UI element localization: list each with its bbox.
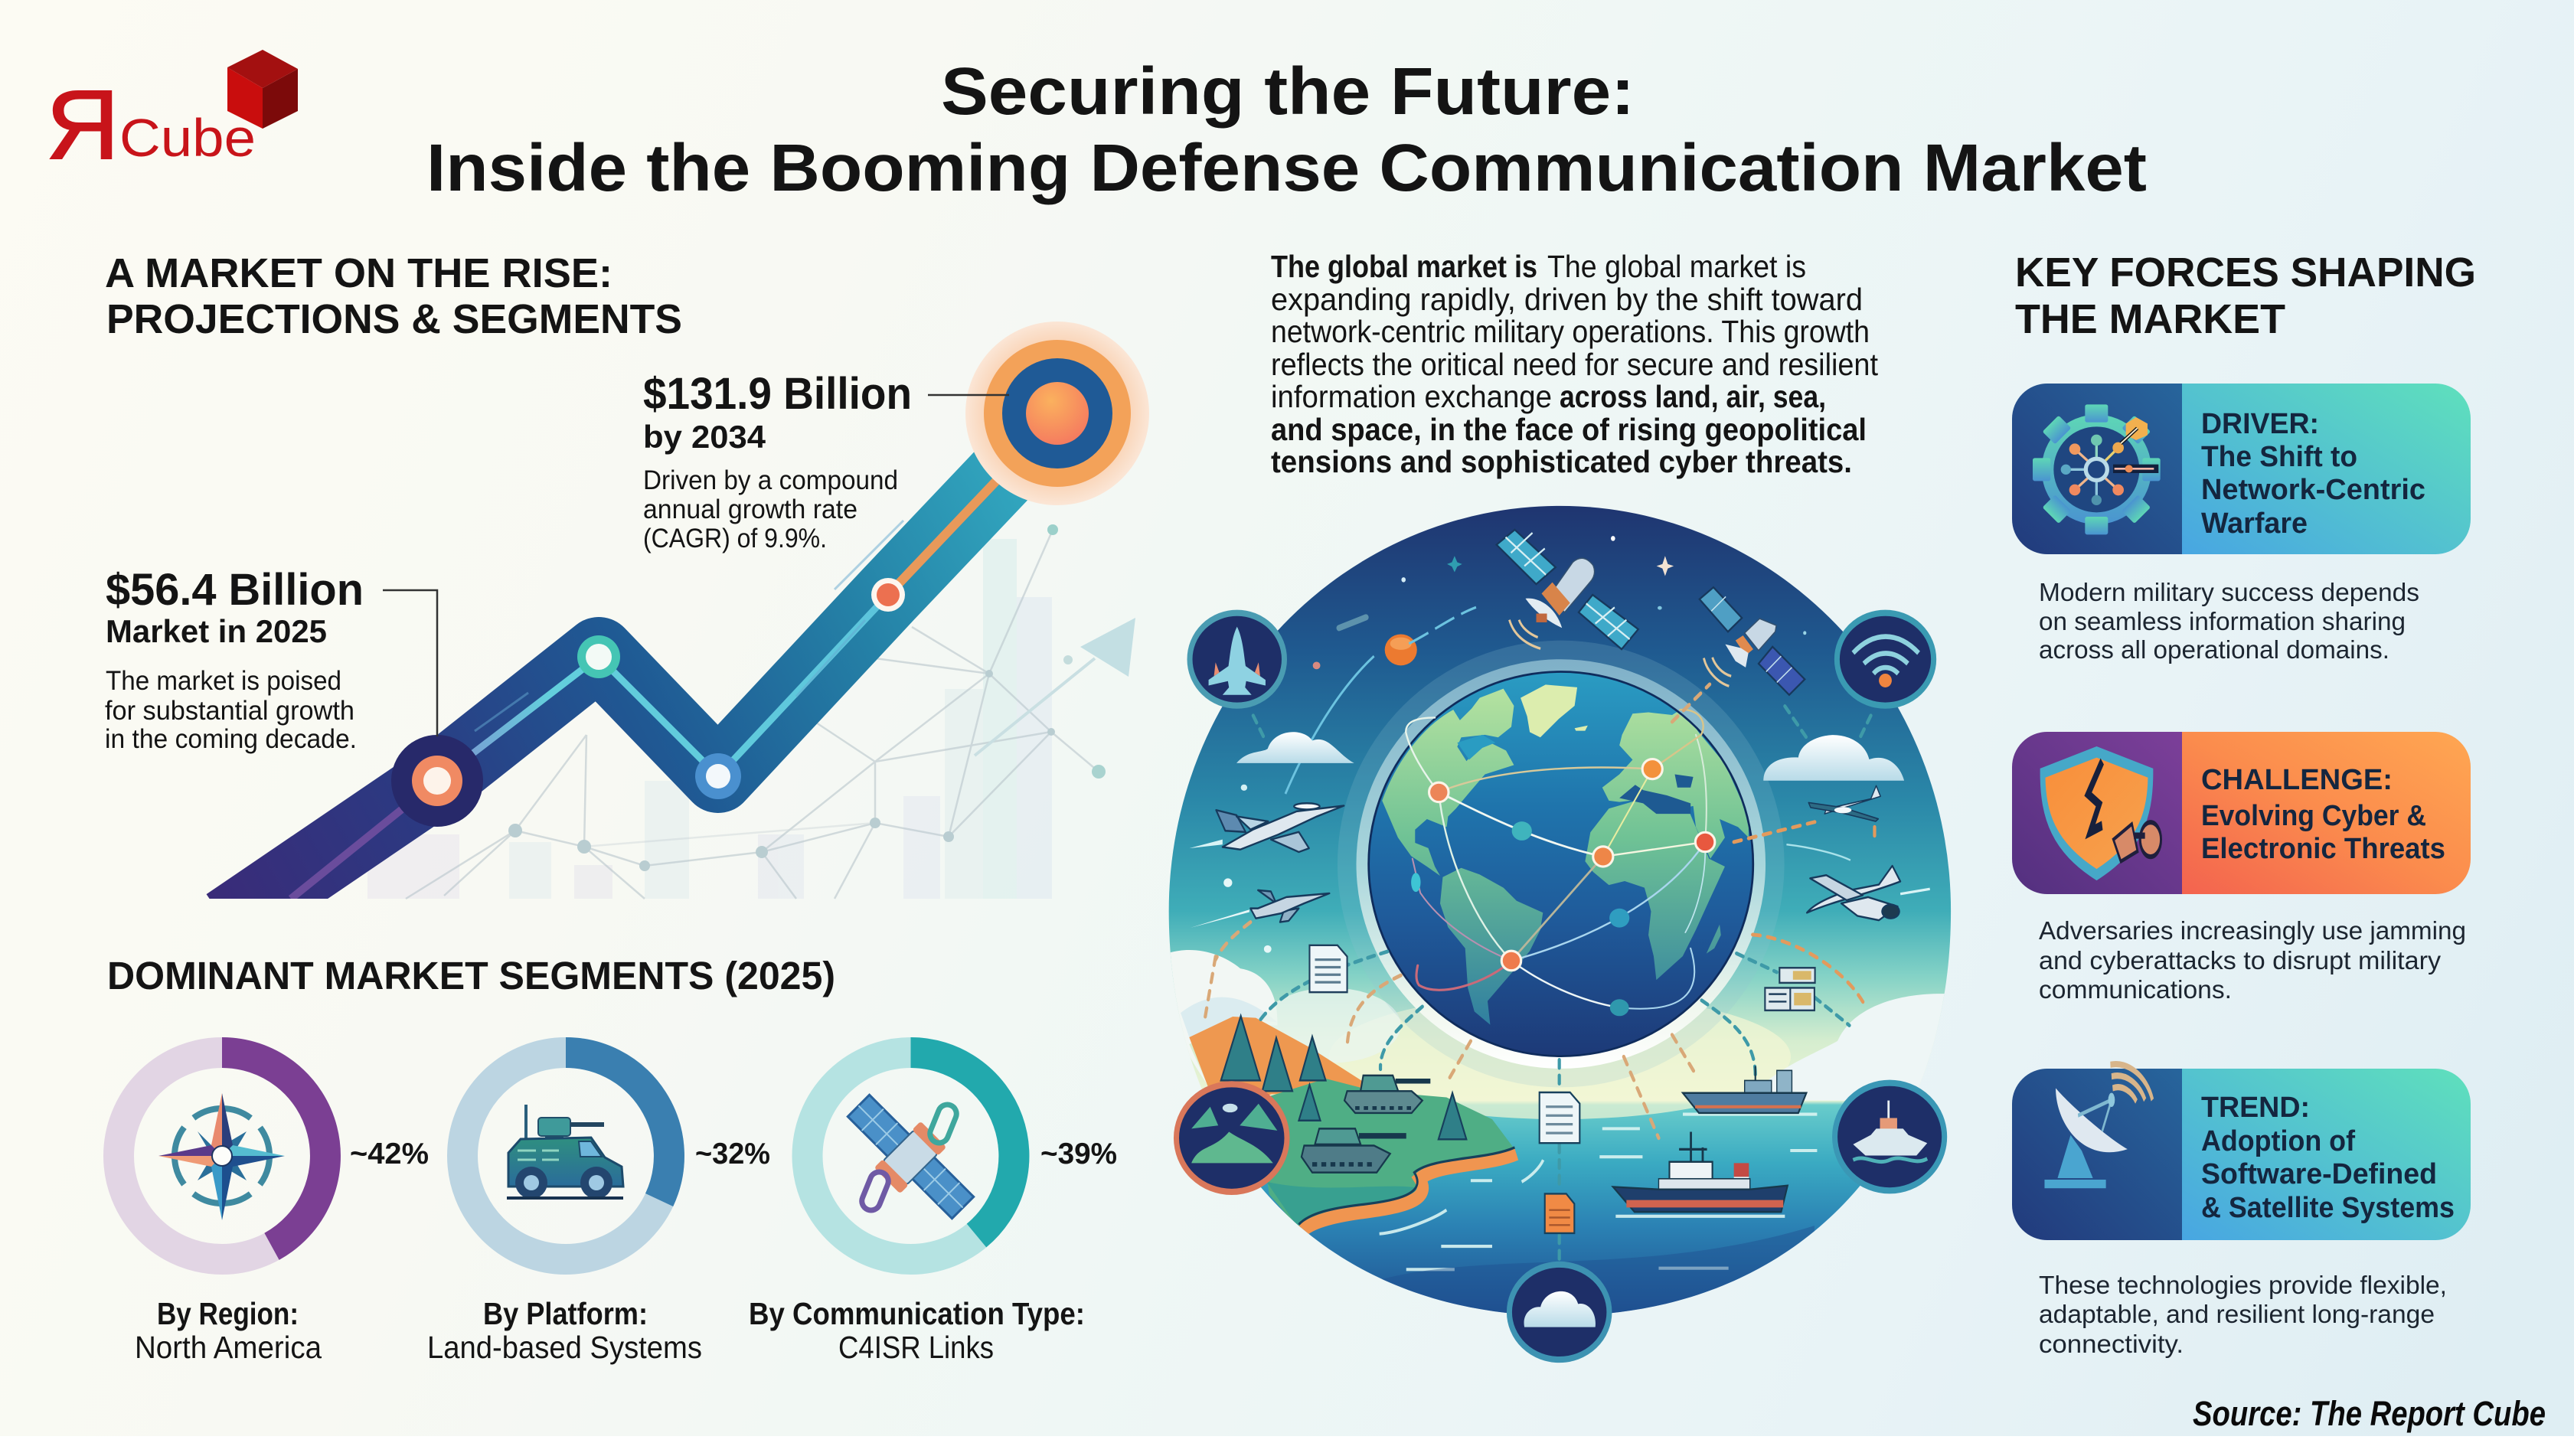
tank 2 (1302, 1128, 1406, 1173)
node: 2025 (391, 735, 483, 827)
node: orange (871, 578, 905, 612)
tank 1 (1344, 1076, 1430, 1113)
icon: satellite dish (2044, 1064, 2152, 1188)
label: Land-based Systems (427, 1330, 702, 1365)
challenge text: CHALLENGE: (2201, 764, 2393, 796)
scene disc (1169, 506, 1951, 1316)
callout: 2034 value: $131.9 Billion (643, 369, 912, 419)
heading: market on the rise: A MARKET ON THE RISE: (105, 250, 612, 296)
growth line chart (227, 322, 1149, 924)
icon circle: wireless (1837, 613, 1934, 706)
driver text (2201, 408, 2425, 540)
logo: RCube (46, 50, 298, 180)
title (426, 54, 2147, 205)
intro paragraph: The global market is (1547, 249, 1806, 284)
faint network (406, 530, 1099, 899)
aircraft: right upper (1808, 785, 1880, 821)
label (135, 1296, 322, 1365)
percent: ~32% (695, 1138, 770, 1170)
logo: RCube: Cube (119, 108, 256, 168)
trend text: & Satellite Systems (2201, 1192, 2455, 1224)
label: By Communication Type: (749, 1296, 1085, 1331)
callout: 2025 value (105, 565, 437, 754)
icon: network gear (2033, 404, 2161, 534)
central illustration: connected domains (1159, 506, 1954, 1360)
driver description: on seamless information sharing (2039, 607, 2406, 635)
label (749, 1296, 1085, 1365)
label: By Platform: (483, 1296, 648, 1331)
intro paragraph: tensions and sophisticated cyber threats. (1271, 444, 1852, 479)
challenge text: Electronic Threats (2201, 833, 2445, 865)
callout: 2034 value (643, 369, 1009, 553)
trend description: adaptable, and resilient long-range (2039, 1300, 2435, 1328)
donut: by region (119, 1053, 429, 1365)
challenge description (2039, 916, 2466, 1004)
ship 2 (1613, 1131, 1788, 1212)
island (1256, 1079, 1514, 1229)
driver text: Network-Centric (2201, 474, 2425, 506)
intro paragraph: across land, air, sea, (1560, 379, 1826, 414)
donut: by platform (427, 1053, 770, 1365)
callout: 2034 value: annual growth rate (643, 495, 857, 524)
callout: 2025 value: Market in 2025 (106, 613, 327, 649)
trend text: TREND: (2201, 1092, 2310, 1124)
callout: 2025 value: for substantial growth (105, 696, 354, 726)
heading: key forces: THE MARKET (2015, 296, 2285, 342)
routes (1406, 710, 1707, 1009)
relay nodes (1411, 821, 1629, 1016)
intro paragraph: information exchange (1271, 379, 1552, 414)
trees (1221, 1016, 1466, 1139)
satellite 2 (1700, 587, 1805, 695)
icon: satellite link (848, 1095, 974, 1219)
intro paragraph: network-centric military operations. This growth (1271, 314, 1870, 349)
driver description: Modern military success depends (2039, 578, 2419, 606)
card: trend (2012, 1064, 2471, 1240)
right clouds (1769, 994, 1945, 1101)
coast (1302, 1154, 1517, 1232)
challenge description: communications. (2039, 975, 2232, 1004)
mid mist (1261, 988, 1401, 1063)
orange ball and stars (1223, 536, 1850, 953)
driver description: across all operational domains. (2039, 635, 2389, 664)
intro paragraph: and space, in the face of rising geopolitical (1271, 412, 1867, 447)
dashed links (1205, 684, 1874, 1260)
title: Securing the Future: (941, 54, 1635, 129)
challenge text (2201, 764, 2445, 865)
globe (1367, 671, 1754, 1057)
heading: dominant market segments: DOMINANT MARKET SEGMENTS (2025) (107, 954, 835, 997)
trend text (2201, 1092, 2455, 1224)
intro paragraph (1271, 249, 1879, 479)
driver text: Warfare (2201, 508, 2308, 540)
trend description: connectivity. (2039, 1330, 2184, 1358)
icon: cracked shield (2043, 752, 2161, 875)
icon circle: jet (1190, 613, 1284, 706)
logo: RCube: Я (46, 70, 119, 180)
icon: data cards (1765, 968, 1815, 1010)
heading: market on the rise: PROJECTIONS & SEGMENTS (106, 296, 682, 342)
trend text: Software-Defined (2201, 1158, 2437, 1190)
percent: ~42% (350, 1138, 429, 1170)
label (427, 1296, 702, 1365)
icon circle: land (1176, 1084, 1287, 1192)
clouds (1236, 732, 1904, 781)
mountain (1189, 1017, 1361, 1095)
globe halo (1338, 641, 1785, 1087)
challenge description: and cyberattacks to disrupt military (2039, 946, 2442, 974)
challenge text: Evolving Cyber & (2201, 800, 2426, 832)
label: North America (135, 1330, 322, 1365)
aircraft: fighter 2 (1191, 890, 1329, 928)
sea highlights (1380, 1115, 1817, 1269)
callout: 2025 value: The market is poised (106, 666, 341, 696)
left clouds (1159, 950, 1277, 1085)
callout: 2025 value: $56.4 Billion (106, 565, 364, 615)
donut: by communication type (749, 1053, 1117, 1365)
icon: document 2 (1540, 1092, 1579, 1143)
trend text: Adoption of (2201, 1125, 2355, 1157)
ship 1 (1683, 1066, 1806, 1113)
icon: document 1 (1309, 945, 1347, 992)
satellite 1 (1497, 530, 1638, 649)
trend description (2039, 1271, 2447, 1358)
percent: ~39% (1040, 1138, 1117, 1170)
title: Inside the Booming Defense Communication Market (426, 131, 2147, 205)
icon circle: sea (1835, 1083, 1945, 1190)
driver text: DRIVER: (2201, 408, 2319, 440)
node: peak (577, 635, 620, 678)
aircraft: fighter 1 (1189, 803, 1344, 852)
arrow faint (975, 658, 1095, 756)
icon circle: cloud (1509, 1265, 1609, 1360)
icon: armored vehicle (507, 1105, 623, 1200)
label: By Region: (157, 1296, 299, 1331)
pale glow under globe (1334, 1007, 1791, 1119)
heading: key forces (2015, 250, 2476, 342)
node: 2034 (965, 322, 1149, 505)
node: valley (695, 753, 741, 799)
icon: compass (158, 1093, 285, 1220)
driver text: The Shift to (2201, 441, 2357, 473)
intro paragraph: expanding rapidly, driven by the shift toward (1271, 282, 1863, 317)
icon: document 3 orange (1545, 1193, 1574, 1233)
faint bars backdrop (367, 539, 1052, 899)
intro paragraph: reflects the oritical need for secure and resilient (1271, 347, 1879, 382)
callout: 2034 value: by 2034 (643, 419, 766, 455)
card: driver (2012, 384, 2471, 554)
aircraft: right lower (1807, 866, 1930, 920)
driver description (2039, 578, 2419, 664)
heading: market on the rise (105, 250, 682, 342)
label: C4ISR Links (838, 1330, 994, 1365)
challenge description: Adversaries increasingly use jamming (2039, 916, 2466, 945)
heading: key forces: KEY FORCES SHAPING (2015, 250, 2476, 295)
callout: 2034 value: (CAGR) of 9.9%. (643, 524, 827, 553)
card: challenge (2012, 732, 2471, 894)
trend description: These technologies provide flexible, (2039, 1271, 2447, 1299)
callout: 2034 value: Driven by a compound (643, 465, 898, 495)
intro paragraph: The global market is (1271, 249, 1537, 284)
callout: 2025 value: in the coming decade. (105, 724, 357, 754)
